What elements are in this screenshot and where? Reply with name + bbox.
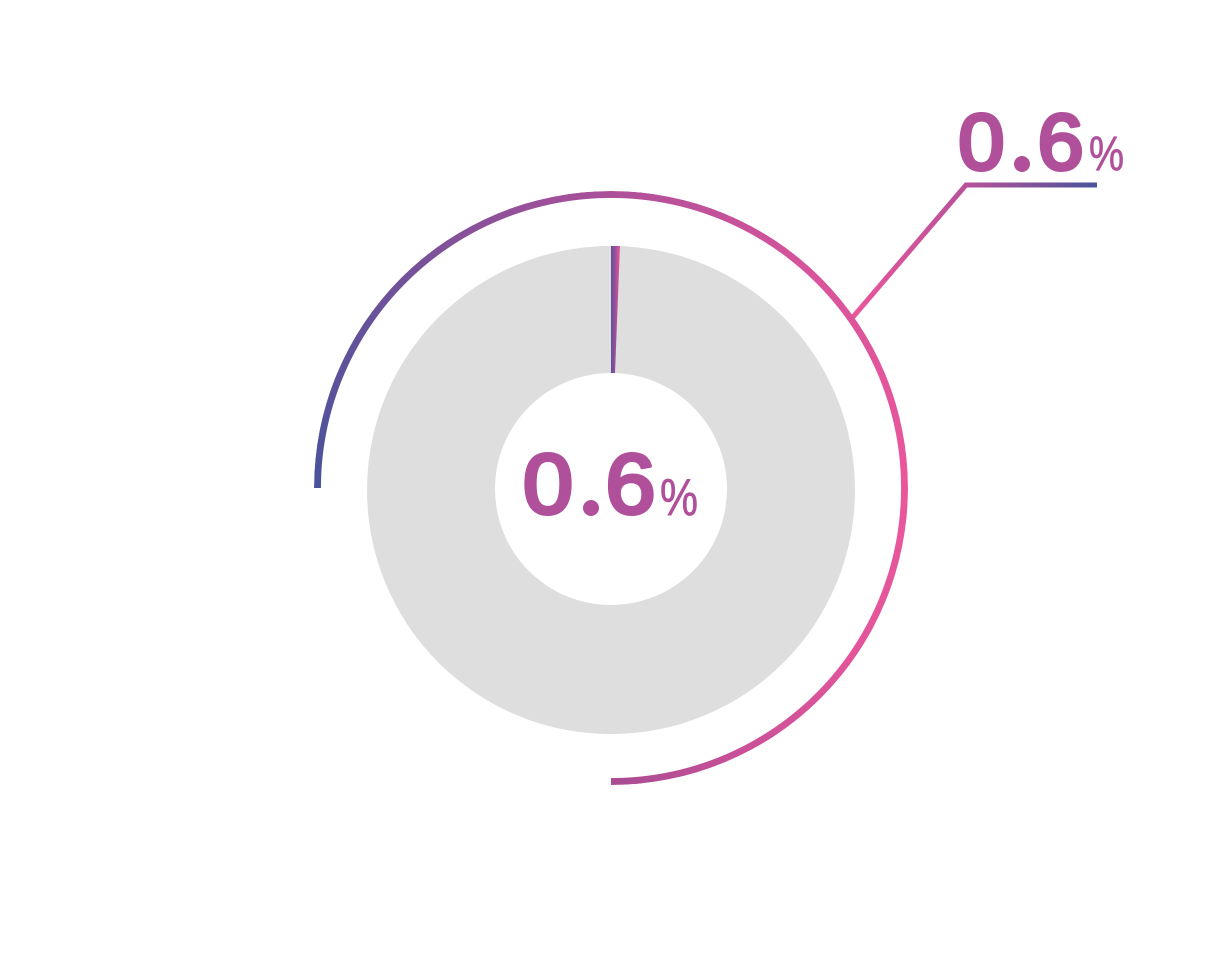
callout value: 0.6%: . [1015, 115, 1032, 182]
centre value: 0.6%: 6 [606, 437, 656, 531]
centre value: 0.6%: 0 [523, 437, 573, 531]
donut ring: remaining share [367, 246, 855, 734]
centre value: 0.6%: % [660, 469, 698, 527]
callout leader line [853, 185, 1097, 317]
outer gradient arc [314, 191, 908, 785]
callout value: 0.6% [958, 97, 1124, 186]
callout value: 0.6%: 0 [958, 97, 1004, 186]
centre value: 0.6%: . [584, 459, 601, 526]
callout value: 0.6%: 6 [1038, 97, 1084, 186]
centre value: 0.6% [523, 437, 698, 531]
infographic: 0.6 percent circle chart [314, 112, 1123, 785]
donut slice: 0.6 percent [611, 246, 620, 373]
callout value: 0.6%: % [1089, 128, 1124, 181]
